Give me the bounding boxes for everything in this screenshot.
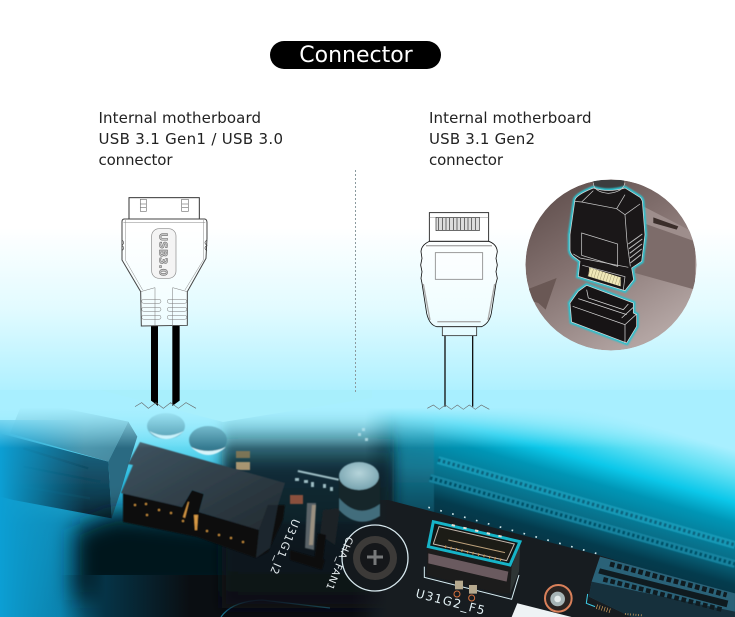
left caption: connector <box>98 151 173 169</box>
left caption: USB 3.1 Gen1 / USB 3.0 <box>98 130 283 148</box>
right caption: Internal motherboard <box>429 109 592 127</box>
fan header <box>290 503 340 570</box>
USB 3.1 Gen2 connector drawing <box>421 213 497 409</box>
board label: U31G1_I2: U31G1_I2 <box>267 517 302 577</box>
title pill <box>270 41 441 69</box>
top fade into background <box>0 390 735 448</box>
board label: CHA_FAN1: CHA_FAN1 <box>323 535 354 592</box>
divider <box>354 170 356 393</box>
background shelf <box>527 206 695 310</box>
screw <box>342 525 408 591</box>
small circuit parts <box>236 428 368 504</box>
left caption: Internal motherboard <box>98 109 261 127</box>
capacitors, centre top <box>147 413 227 455</box>
M.2 socket, right <box>586 557 735 617</box>
USB3.0 mark: USB3.0 <box>156 233 169 276</box>
dark circuit area <box>222 408 394 608</box>
panel outlines <box>221 600 330 617</box>
PCI-E slots <box>430 460 735 564</box>
right caption: connector <box>429 151 504 169</box>
plug <box>570 180 645 291</box>
motherboard photo <box>0 390 735 617</box>
right teal field with slots <box>370 410 735 594</box>
cable <box>593 180 624 189</box>
light wedge above board <box>100 390 372 422</box>
left caption <box>98 109 283 169</box>
USB 3.0 connector drawing <box>122 198 207 408</box>
USB 3.0 pin header <box>121 442 285 558</box>
left memory slot block <box>0 400 137 518</box>
slot block edge <box>392 418 434 513</box>
inset photo circle <box>526 180 696 350</box>
dark PCB, right <box>352 500 735 617</box>
bottom strip of dark board <box>60 575 395 617</box>
right caption <box>429 109 592 169</box>
cable <box>445 336 473 407</box>
dark centre of board <box>72 512 395 600</box>
USB 3.1 Gen2 header on board <box>424 522 520 601</box>
left blue edge glow <box>0 420 85 617</box>
board label: U31G2_F5: U31G2_F5 <box>414 586 487 617</box>
cables <box>151 326 180 406</box>
socket <box>570 285 637 343</box>
right caption: USB 3.1 Gen2 <box>429 130 535 148</box>
capacitor, large <box>339 462 380 522</box>
title pill: Connector <box>299 43 414 68</box>
